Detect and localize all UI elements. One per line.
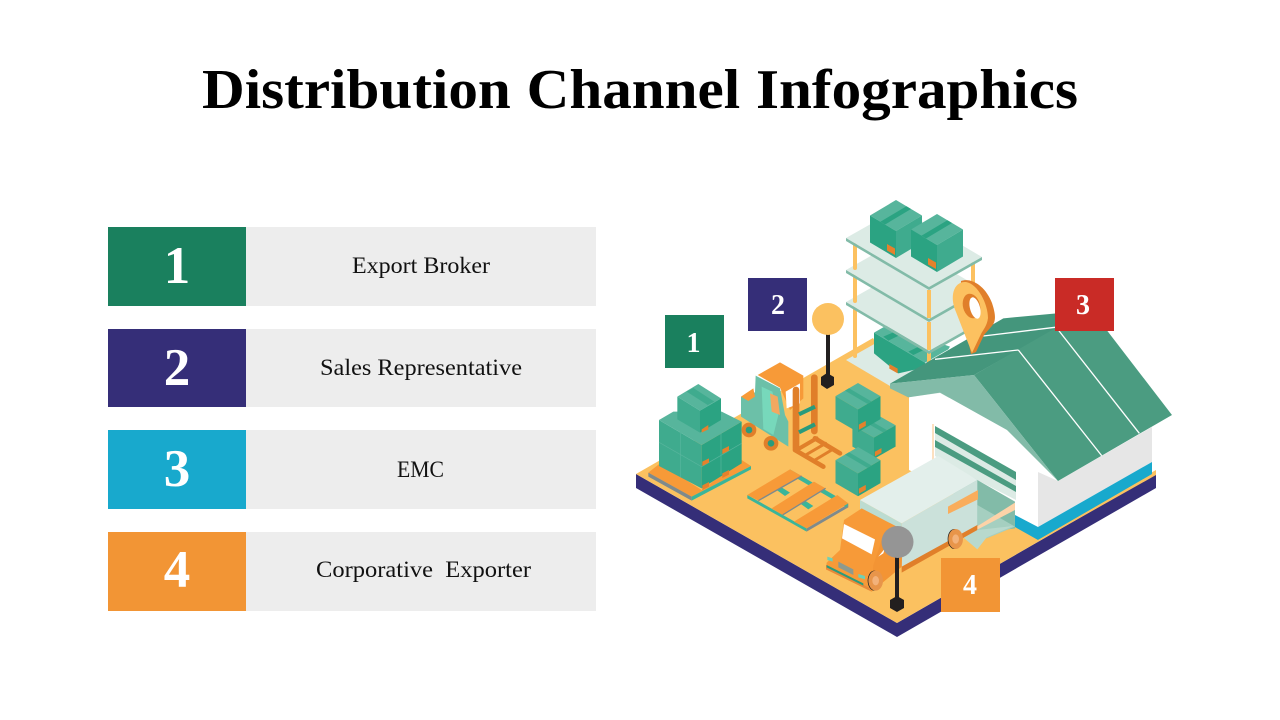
forklift [741, 362, 840, 467]
row 1: Export Broker: 1 [164, 237, 190, 295]
row 4: Corporative Exporter: Corporative Exporter [316, 557, 531, 582]
row 4: Corporative Exporter [108, 532, 596, 611]
row 3: EMC: EMC [397, 457, 444, 482]
row 1: Export Broker: Export Broker [352, 253, 490, 278]
loading dock door [932, 424, 1016, 549]
label 4 [941, 558, 1000, 612]
illustration: isometric warehouse [636, 200, 1172, 637]
row 2: Sales Representative [108, 329, 596, 407]
dock interior and ramp [953, 467, 1015, 549]
storage shelf [846, 200, 982, 409]
building walls [909, 393, 1156, 542]
row 4: Corporative Exporter: 4 [164, 541, 190, 599]
row 1: Export Broker [108, 227, 596, 306]
label 3 [1055, 278, 1114, 331]
delivery truck [826, 456, 978, 592]
marker post: yellow [812, 303, 844, 389]
stacked boxes on pallet [648, 384, 751, 501]
label 4: 4 [963, 570, 977, 601]
label 1: 1 [686, 328, 700, 359]
label 3: 3 [1076, 290, 1090, 321]
row 2: Sales Representative: Sales Representative [320, 355, 522, 380]
label 2: 2 [771, 290, 785, 321]
marker post: gray [882, 526, 914, 612]
shelf boxes, top level [870, 200, 963, 272]
label 2 [748, 278, 807, 331]
platform base [636, 338, 1156, 637]
shelf boxes, lower level [874, 325, 950, 373]
label 1 [665, 315, 724, 368]
row 2: Sales Representative: 2 [164, 339, 190, 397]
row 3: EMC: 3 [164, 440, 190, 498]
roof [890, 313, 1172, 481]
title: Distribution Channel Infographics [202, 59, 1078, 121]
row 3: EMC [108, 430, 596, 509]
list: distribution channels [108, 227, 596, 611]
location pin on roof [953, 280, 995, 354]
empty pallet [747, 469, 848, 532]
warehouse floor boxes [836, 383, 896, 496]
